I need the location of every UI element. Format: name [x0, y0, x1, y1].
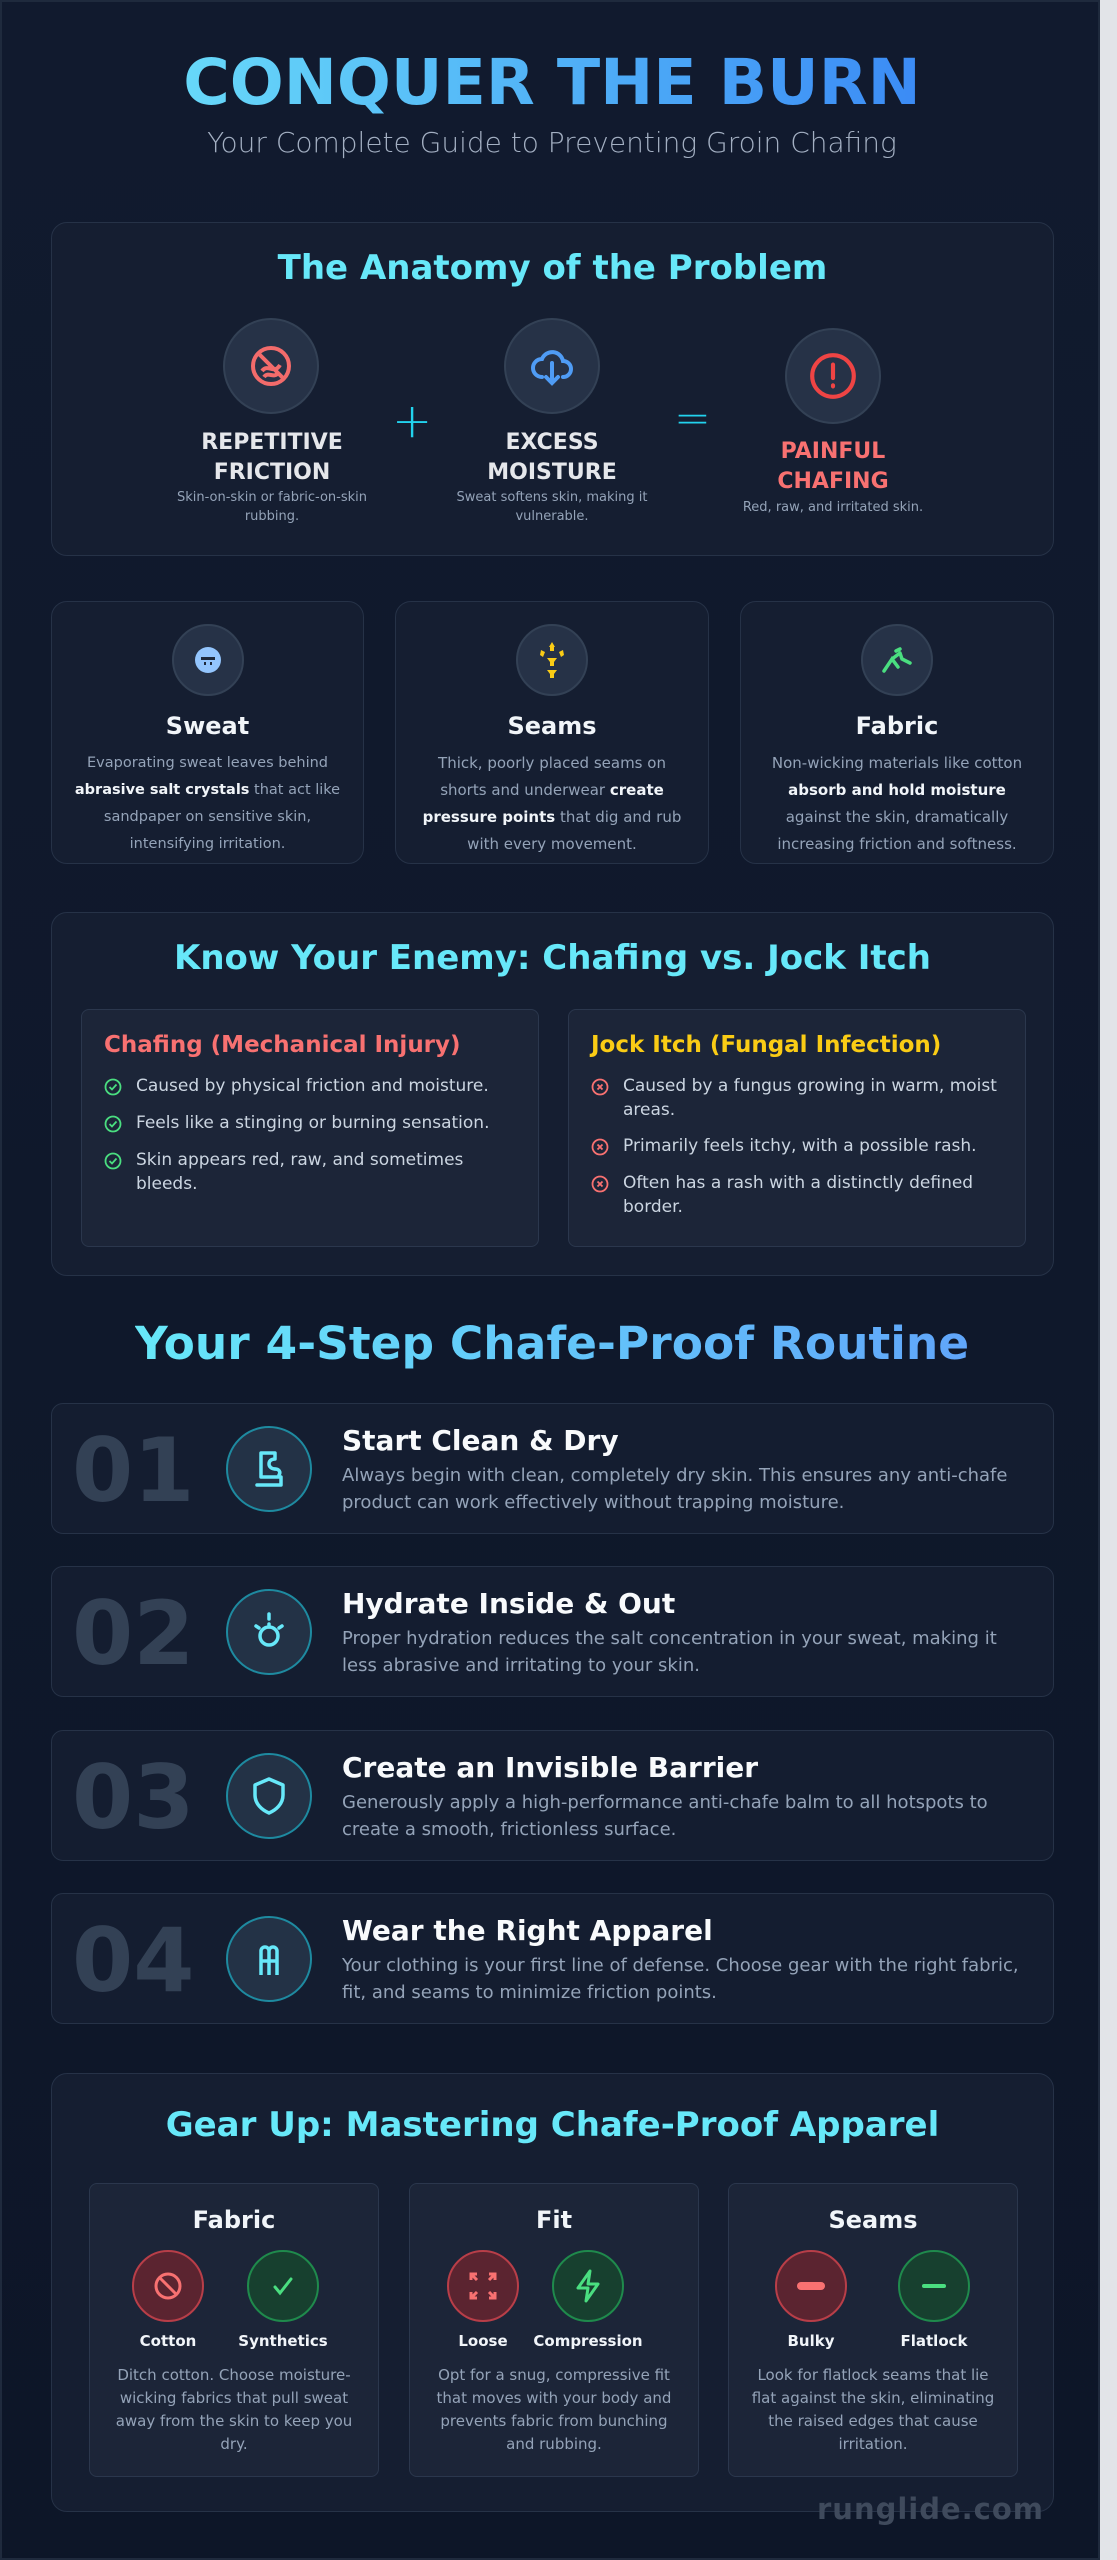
card: fabric — [89, 2183, 379, 2477]
panel: gear up — [51, 2073, 1054, 2512]
label: excess moisture — [487, 430, 617, 485]
step 04 — [51, 1893, 1054, 2024]
icon: shield — [226, 1753, 312, 1839]
text: Proper hydration reduces the salt concentration in your sweat, making it less abrasive and irritating to your skin. — [342, 1628, 997, 1676]
title: fabric: Fabric — [856, 712, 938, 740]
watermark: runglide.com — [817, 2492, 1044, 2526]
icon: compression — [552, 2250, 624, 2322]
text: Your clothing is your first line of defense. Choose gear with the right fabric, fit, and seams to minimize friction points. — [342, 1955, 1019, 2003]
title: Wear the Right Apparel — [342, 1914, 713, 1947]
desc: chafing: Red, raw, and irritated skin. — [743, 500, 923, 515]
list item 3: Skin appears red, raw, and sometimes bleeds. — [136, 1150, 463, 1194]
text: Look for flatlock seams that lie flat against the skin, eliminating the raised edges that cause irritation. — [752, 2366, 994, 2453]
text: seams: Thick, poorly placed seams on shorts and underwear create pressure points that dig and rub with every movement. — [423, 754, 681, 853]
label: repetitive friction: REPETITIVE — [201, 430, 343, 455]
card: seams — [728, 2183, 1018, 2477]
label: excess moisture: MOISTURE — [487, 460, 617, 485]
label: painful chafing — [777, 439, 889, 494]
panel: know your enemy — [51, 912, 1054, 1276]
step 01 — [51, 1403, 1054, 1534]
icon: fabric — [861, 624, 933, 696]
equals sign: = — [674, 393, 711, 444]
list item 1: Caused by physical friction and moisture. — [136, 1076, 489, 1096]
label: cotton: Cotton — [140, 2332, 196, 2350]
icon: apparel — [226, 1916, 312, 2002]
desc: friction: Skin-on-skin or fabric-on-skin rubbing. — [177, 490, 367, 524]
list item 3: Often has a rash with a distinctly defined border. — [623, 1173, 973, 1217]
icon: painful chafing — [785, 328, 881, 424]
label: loose: Loose — [458, 2332, 508, 2350]
title: CONQUER THE BURN — [183, 45, 921, 119]
label: excess moisture: EXCESS — [505, 430, 599, 455]
subheading: chafing: Chafing (Mechanical Injury) — [104, 1032, 461, 1058]
title: Hydrate Inside & Out — [342, 1587, 675, 1620]
subheading: jock itch: Jock Itch (Fungal Infection) — [591, 1032, 941, 1058]
icon: sweat — [172, 624, 244, 696]
step 02 — [51, 1566, 1054, 1697]
icon: synthetics — [247, 2250, 319, 2322]
heading: anatomy: The Anatomy of the Problem — [278, 248, 827, 288]
icon: flatlock — [898, 2250, 970, 2322]
label: repetitive friction: FRICTION — [214, 460, 330, 485]
plus sign: + — [392, 393, 432, 449]
card: sweat — [51, 601, 364, 864]
text: Generously apply a high-performance anti-chafe balm to all hotspots to create a smooth, frictionless surface. — [342, 1792, 988, 1840]
text: Always begin with clean, completely dry skin. This ensures any anti-chafe product can work effectively without trapping moisture. — [342, 1465, 1007, 1513]
icon: hydrate — [226, 1589, 312, 1675]
icon: moisture — [504, 318, 600, 414]
heading: gear up: Gear Up: Mastering Chafe-Proof Apparel — [166, 2105, 939, 2145]
icon: loose — [447, 2250, 519, 2322]
text: Opt for a snug, compressive fit that moves with your body and prevents fabric from bunching and rubbing. — [437, 2366, 671, 2453]
card: fabric — [740, 601, 1054, 864]
text: Ditch cotton. Choose moisture-wicking fabrics that pull sweat away from the skin to keep you dry. — [116, 2366, 352, 2453]
title: Seams — [828, 2206, 918, 2234]
box: chafing — [81, 1009, 539, 1247]
title: sweat: Sweat — [166, 712, 249, 740]
label: painful chafing: CHAFING — [777, 469, 889, 494]
heading: routine: Your 4-Step Chafe-Proof Routine — [135, 1317, 969, 1370]
title: Start Clean & Dry — [342, 1424, 619, 1457]
heading: know your enemy: Know Your Enemy: Chafing vs. Jock Itch — [174, 938, 931, 978]
number 01: 01 — [72, 1419, 194, 1522]
icon: bulky — [775, 2250, 847, 2322]
desc: moisture: Sweat softens skin, making it vulnerable. — [457, 490, 647, 524]
step 03 — [51, 1730, 1054, 1861]
title: Fabric — [193, 2206, 275, 2234]
label: compression: Compression — [533, 2332, 643, 2350]
box: jock itch — [568, 1009, 1026, 1247]
list item 2: Primarily feels itchy, with a possible rash. — [623, 1136, 977, 1156]
label: repetitive friction — [201, 430, 343, 485]
label: bulky: Bulky — [787, 2332, 834, 2350]
title: Fit — [536, 2206, 572, 2234]
number 03: 03 — [72, 1746, 194, 1849]
label: painful chafing: PAINFUL — [781, 439, 885, 464]
list item 1: Caused by a fungus growing in warm, moist areas. — [623, 1076, 997, 1120]
label: flatlock: Flatlock — [900, 2332, 968, 2350]
number 02: 02 — [72, 1582, 194, 1685]
icon: seams — [516, 624, 588, 696]
text: fabric: Non-wicking materials like cotton absorb and hold moisture against the skin, dramatically increasing friction and softness. — [772, 754, 1022, 853]
title: seams: Seams — [507, 712, 597, 740]
card: seams — [395, 601, 709, 864]
label: synthetics: Synthetics — [238, 2332, 328, 2350]
list item 2: Feels like a stinging or burning sensation. — [136, 1113, 489, 1133]
panel: anatomy of the problem — [51, 222, 1054, 556]
subtitle: Your Complete Guide to Preventing Groin Chafing — [207, 126, 897, 159]
icon: clean — [226, 1426, 312, 1512]
icon: cotton — [132, 2250, 204, 2322]
card: fit — [409, 2183, 699, 2477]
title: Create an Invisible Barrier — [342, 1751, 758, 1784]
number 04: 04 — [72, 1909, 194, 2012]
text: sweat: Evaporating sweat leaves behind abrasive salt crystals that act like sandpaper on sensitive skin, intensifying irritation. — [75, 755, 340, 852]
icon: friction — [223, 318, 319, 414]
